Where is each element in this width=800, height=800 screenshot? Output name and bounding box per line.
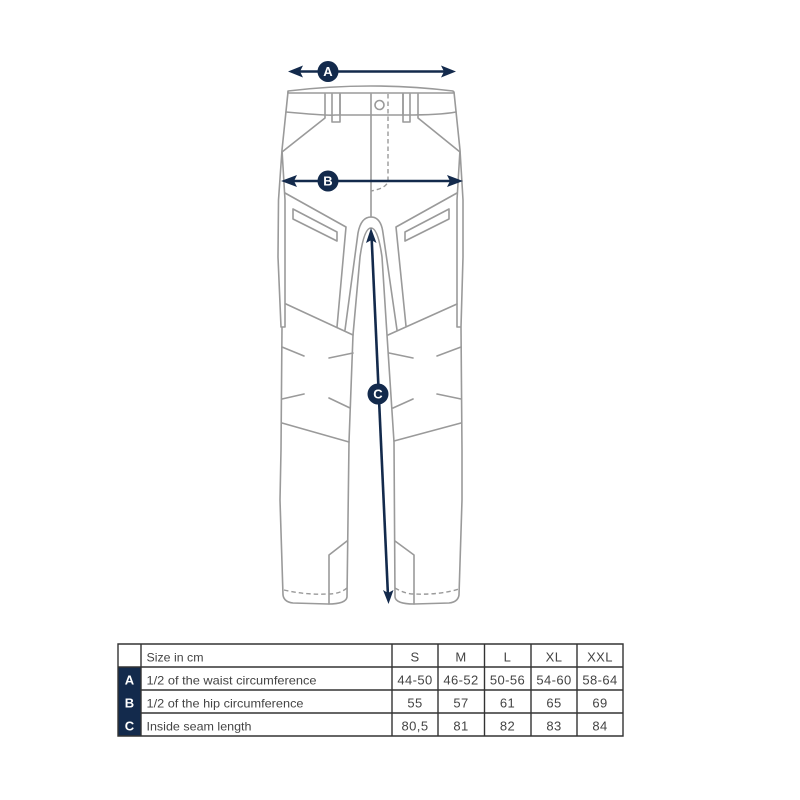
row letters: B bbox=[125, 696, 134, 710]
row labels: 1/2 of the hip circumference bbox=[146, 696, 304, 710]
seam values: 81 bbox=[453, 718, 469, 734]
waist values: 46-52 bbox=[443, 672, 479, 688]
row letters bbox=[125, 672, 135, 734]
seam values: 84 bbox=[592, 718, 608, 734]
seam values: 82 bbox=[500, 718, 515, 734]
pants technical drawing bbox=[278, 86, 463, 604]
row labels bbox=[146, 650, 317, 734]
measure A: waist arrow: A bbox=[323, 64, 333, 79]
left outer seam bbox=[278, 92, 371, 604]
size header row: XL bbox=[546, 650, 562, 664]
fly and front seam bbox=[371, 94, 388, 217]
hip values: 69 bbox=[592, 696, 608, 710]
hip values: 55 bbox=[407, 696, 423, 710]
thigh pockets bbox=[285, 193, 457, 327]
measure C: inside seam arrow bbox=[366, 228, 394, 604]
table grid bbox=[118, 644, 623, 736]
measure A: waist arrow bbox=[288, 61, 456, 82]
waist values bbox=[397, 672, 618, 688]
size header row: S bbox=[410, 650, 420, 664]
seam values bbox=[402, 718, 608, 734]
right outer seam bbox=[371, 92, 463, 604]
measure B: hip arrow bbox=[281, 170, 463, 192]
crotch gusset bbox=[345, 217, 397, 330]
hip values: 61 bbox=[500, 696, 515, 710]
waist values: 50-56 bbox=[490, 672, 525, 688]
size header row bbox=[410, 650, 613, 664]
row letters: C bbox=[125, 718, 135, 734]
waist values: 44-50 bbox=[397, 672, 433, 688]
row letters: A bbox=[125, 672, 135, 688]
waist values: 58-64 bbox=[582, 672, 618, 688]
seam values: 83 bbox=[546, 718, 562, 734]
knee panel seams bbox=[282, 304, 461, 442]
seam values: 80,5 bbox=[402, 718, 428, 734]
hip values: 65 bbox=[546, 696, 562, 710]
waistband bbox=[286, 86, 456, 122]
hip values: 57 bbox=[453, 696, 469, 710]
measure B: hip arrow: B bbox=[323, 174, 333, 188]
letter column cells bbox=[118, 667, 141, 736]
hip pocket seams bbox=[282, 115, 460, 152]
hip values bbox=[407, 696, 608, 710]
measure C: inside seam arrow: C bbox=[373, 386, 383, 402]
size table bbox=[118, 644, 623, 736]
size header row: L bbox=[504, 650, 511, 664]
row labels: Size in cm bbox=[146, 650, 204, 664]
size header row: M bbox=[455, 650, 467, 664]
row labels: Inside seam length bbox=[146, 720, 252, 734]
waist values: 54-60 bbox=[536, 672, 572, 688]
hem and ankle details bbox=[284, 541, 459, 604]
size header row: XXL bbox=[587, 650, 613, 664]
row labels: 1/2 of the waist circumference bbox=[146, 674, 317, 688]
